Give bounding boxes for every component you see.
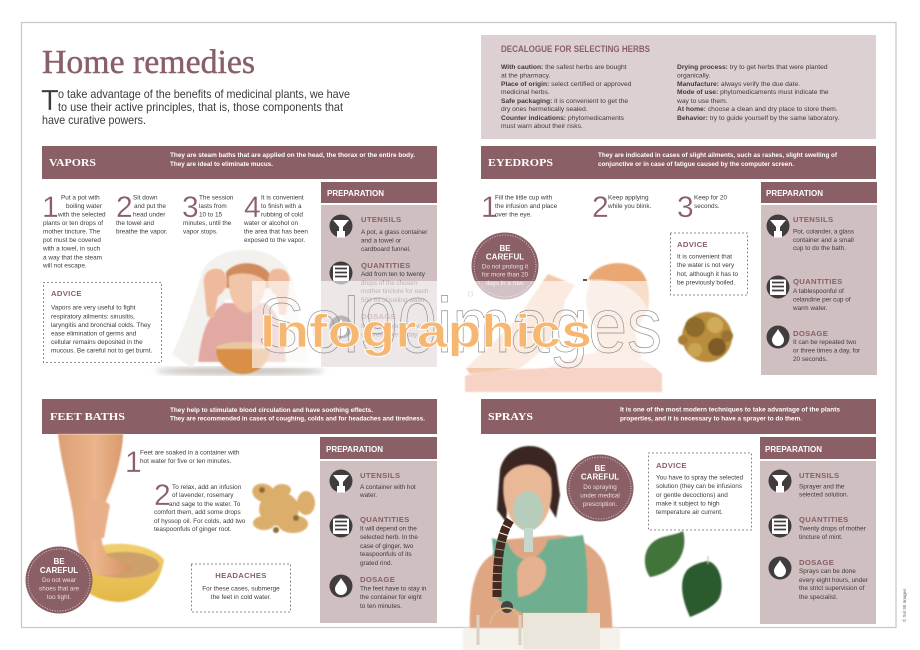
step 2: and put the <box>134 203 166 210</box>
preparation panel: vapors: drops of the chosen <box>361 280 418 287</box>
be careful badge: BE <box>499 244 511 253</box>
be careful badge <box>566 454 634 522</box>
advice box: or gentle decoctions) and <box>656 492 728 499</box>
panel: feet baths <box>26 399 437 623</box>
advice box: ADVICE <box>51 289 82 298</box>
be careful badge: shoes that are <box>39 586 79 592</box>
advice box <box>670 233 748 295</box>
decalogue left column: must warn about their risks. <box>501 123 583 130</box>
advice box: laryngitis and bronchial colds. They <box>51 322 152 329</box>
preparation panel: eyedrops: or three times a day, for <box>793 347 861 354</box>
advice box <box>44 282 162 362</box>
be careful badge: Do spraying <box>583 484 617 491</box>
step 1: with a towel, in such <box>42 246 101 253</box>
photo: woman applying eyedrops <box>465 263 662 392</box>
preparation panel: vapors: DOSAGE <box>361 312 396 321</box>
preparation panel: sprays: every eight hours, under <box>799 577 869 584</box>
preparation panel: eyedrops: container and a small <box>793 237 854 244</box>
step 1: boiling water <box>66 203 103 210</box>
preparation panel: eyedrops: UTENSILS <box>793 215 833 224</box>
step 2: head under <box>133 212 166 219</box>
feet baths header bar <box>42 399 437 434</box>
advice box: temperature air current. <box>656 509 723 516</box>
decalogue right column: Behavior: try to guide yourself by the same laboratory. <box>677 115 839 122</box>
sprays header bar <box>481 399 876 434</box>
preparation panel: eyedrops: PREPARATION <box>766 189 823 198</box>
preparation panel: eyedrops: DOSAGE <box>793 329 828 338</box>
advice box: solution (they can be infusions <box>656 483 742 490</box>
photo: woman inhaling vapor <box>155 250 325 375</box>
watermark: Sol90images <box>258 281 662 369</box>
preparation panel: vapors: A pot, a glass container <box>361 229 428 236</box>
preparation panel: feet baths: DOSAGE <box>360 575 395 584</box>
preparation panel: vapors: mother tincture for each <box>361 288 429 295</box>
decalogue right column: At home: choose a clean and dry place to store them. <box>677 106 838 113</box>
step 1: Fill the little cup with <box>495 194 553 201</box>
preparation panel: sprays: DOSAGE <box>799 558 834 567</box>
intro text: T <box>41 85 59 117</box>
advice box: ease elimination of germs and <box>51 331 137 338</box>
step 2 <box>116 191 168 236</box>
preparation panel: feet baths: water. <box>359 492 377 499</box>
photo: girl with nebulizer mask <box>463 446 620 650</box>
decalogue left column: at the pharmacy. <box>501 72 550 80</box>
advice box: ADVICE <box>677 240 708 249</box>
preparation panel: eyedrops: Pot, colander, a glass <box>793 229 854 236</box>
headaches box: the feet in cold water. <box>211 594 271 601</box>
decalogue right column: Manufacture: always verify the due date. <box>677 81 800 88</box>
step 2: 2 <box>154 479 171 512</box>
advice box: make it subject to high <box>656 501 720 508</box>
preparation panel: feet baths: PREPARATION <box>326 445 383 454</box>
panel: eyedrops <box>465 146 877 392</box>
headaches box <box>192 564 290 612</box>
vapors header bar: They are steam baths that are applied on the head, the thorax or the entire body. <box>170 152 415 159</box>
decalogue right column <box>676 64 839 122</box>
preparation panel: sprays: Twenty drops of mother <box>799 526 867 532</box>
step 2: Sit down <box>133 194 158 201</box>
preparation panel: feet baths: teaspoonfuls of its <box>360 551 412 558</box>
decalogue left column: medicinal herbs. <box>501 89 550 96</box>
step 2 <box>592 191 652 224</box>
step 1 <box>125 446 240 479</box>
title: Home remedies <box>42 44 255 81</box>
sprays header bar: It is one of the most modern techniques to take advantage of the plants <box>620 406 840 414</box>
be careful badge: BE <box>594 464 606 473</box>
step 2: the towel and <box>116 220 154 227</box>
step 4: exposed to the vapor. <box>244 237 305 244</box>
icon: list <box>766 276 790 298</box>
icon: funnel <box>768 470 792 492</box>
be careful badge <box>472 232 538 300</box>
advice box: the water is not very <box>677 262 735 269</box>
preparation panel: feet baths <box>320 437 437 623</box>
step 1: 1 <box>125 446 142 479</box>
preparation panel: sprays: Sprayer and the <box>799 483 845 490</box>
preparation panel: vapors: It can be repeated two <box>361 323 425 330</box>
icon: funnel <box>330 470 352 492</box>
advice box: hot, although it has to <box>677 271 739 278</box>
preparation panel: vapors: 500 ml of boiling water. <box>361 297 427 304</box>
preparation panel: feet baths: grated rind. <box>360 560 393 567</box>
advice box: cellular remains deposited in the <box>51 339 143 346</box>
preparation panel: sprays: PREPARATION <box>765 445 822 454</box>
decalogue left column: With caution: the safest herbs are bought <box>501 64 627 71</box>
step 1: 1 <box>481 191 498 224</box>
decalogue left column: Place of origin: select certified or approved <box>501 81 632 88</box>
step 3: 3 <box>677 191 694 224</box>
be careful badge: CAREFUL <box>581 472 619 482</box>
step 3: 10 to 15 <box>199 212 223 219</box>
step 2 <box>154 479 246 533</box>
icon: drop <box>330 574 352 598</box>
advice box: be previously boiled. <box>677 280 735 287</box>
step 1: Feet are soaked in a container with <box>140 450 240 456</box>
eyedrops header bar <box>481 146 876 179</box>
step 2: teaspoonfuls of ginger root. <box>154 526 232 533</box>
be careful badge: for more than 20 <box>482 272 529 278</box>
icon: list <box>330 514 352 538</box>
credit: © Sol 90 Images <box>901 588 907 622</box>
step 1: with the selected <box>57 212 106 219</box>
feet baths header bar: FEET BATHS <box>50 411 125 423</box>
be careful badge: days in a row. <box>486 280 524 287</box>
intro text: o take advantage of the benefits of medicinal plants, we have <box>58 87 350 101</box>
be careful badge: Do not wear <box>42 577 76 584</box>
be careful badge: Do not prolong it <box>482 264 528 270</box>
preparation panel: sprays: the strict supervision of <box>799 585 865 592</box>
preparation panel: vapors: Add from ten to twenty <box>361 271 426 278</box>
step 1: a way that the steam <box>43 254 102 261</box>
step 2: comfort them, add some drops <box>154 509 241 516</box>
preparation panel: feet baths: The feet have to stay in <box>360 586 427 592</box>
preparation panel: feet baths: UTENSILS <box>360 471 400 480</box>
step 4: 4 <box>244 191 261 224</box>
photo: ginger root <box>250 480 315 533</box>
step 1: mother tincture. The <box>43 229 101 236</box>
icon: funnel <box>330 214 352 238</box>
preparation panel: sprays <box>760 437 876 624</box>
advice box: respiratory ailments: sinusitis, <box>51 313 135 320</box>
decalogue left column: Counter indications: phytomedicaments <box>501 115 625 122</box>
preparation panel: vapors: PREPARATION <box>327 189 384 198</box>
step 1 <box>42 191 106 270</box>
step 4: It is convenient <box>261 194 304 201</box>
preparation panel: eyedrops: cup to do the bath. <box>793 245 846 252</box>
icon: funnel <box>766 214 790 238</box>
preparation panel: sprays: QUANTITIES <box>799 515 849 524</box>
preparation panel: feet baths: the container for eight <box>360 594 422 601</box>
preparation panel: sprays: Sprays can be done <box>799 568 856 575</box>
preparation panel: eyedrops: 20 seconds. <box>793 356 828 363</box>
decalogue right column: Drying process: try to get herbs that were planted <box>677 64 828 71</box>
step 1: over the eye. <box>495 212 532 219</box>
icon: list <box>768 514 792 538</box>
intro text: have curative powers. <box>42 113 146 127</box>
preparation panel: vapors: and a towel or <box>361 238 402 245</box>
preparation panel: feet baths: case of ginger, two <box>360 543 414 550</box>
vapors header bar <box>42 146 437 179</box>
preparation panel: sprays: selected solution. <box>799 492 849 498</box>
preparation panel: eyedrops: It can be repeated two <box>793 339 857 346</box>
step 2: 2 <box>592 191 609 224</box>
step 4: to finish with a <box>261 203 302 210</box>
preparation panel: eyedrops: QUANTITIES <box>793 277 843 286</box>
eyedrops header bar: EYEDROPS <box>488 157 553 169</box>
preparation panel: feet baths: It will depend on the <box>360 526 417 532</box>
advice box <box>648 453 752 530</box>
preparation panel: eyedrops <box>761 182 877 375</box>
be careful badge: CAREFUL <box>486 252 524 262</box>
preparation panel: vapors: cardboard funnel. <box>361 246 411 253</box>
eyedrops header bar: They are indicated in cases of slight ailments, such as rashes, slight swelling of <box>598 152 838 159</box>
step 3: The session <box>199 194 234 201</box>
step 2: while you blink. <box>607 203 652 210</box>
photo: feet in yellow basin <box>58 434 164 602</box>
panel: vapors <box>42 146 437 375</box>
decalogue left column: dry ones hermetically sealed. <box>501 106 588 113</box>
step 3: 3 <box>182 191 199 224</box>
icon: drop <box>766 326 790 348</box>
advice box: You have to spray the selected <box>656 475 744 482</box>
preparation panel: eyedrops: A tablespoonful of <box>793 288 844 295</box>
headaches box: HEADACHES <box>215 571 267 580</box>
advice box: It is convenient that <box>677 254 732 261</box>
decalogue right column: organically. <box>677 72 710 80</box>
feet baths header bar: They are recommended in cases of coughing, colds and for headaches and tiredness. <box>170 416 425 422</box>
decalogue right column: Mode of use: phytomedicaments must indicate the <box>677 89 829 96</box>
watermark: Infographics <box>260 305 592 357</box>
preparation panel: feet baths: selected herb. In the <box>360 534 418 541</box>
step 4: rubbing of cold <box>261 212 303 219</box>
step 3 <box>182 191 234 236</box>
be careful badge: under medical <box>580 492 620 500</box>
preparation panel: vapors: or three times a day. <box>361 332 419 338</box>
step 1: will not escape. <box>42 263 87 270</box>
advice box: mucous. Be careful not to get burnt. <box>51 348 152 355</box>
vapors header bar: VAPORS <box>49 157 96 169</box>
step 3: Keep for 20 <box>694 194 727 201</box>
feet baths header bar: They help to stimulate blood circulation and have soothing effects. <box>170 407 373 414</box>
vapors header bar: They are ideal to eliminate mucus. <box>170 161 273 168</box>
be careful badge: prescription. <box>583 501 617 508</box>
be careful badge <box>26 546 92 614</box>
advice box: ADVICE <box>656 461 687 470</box>
be careful badge: BE <box>53 557 65 566</box>
step 1: the infusion and place <box>495 203 558 210</box>
eyedrops header bar: conjunctive or in case of fatigue caused by the computer screen. <box>598 161 794 168</box>
step 3: vapor stops. <box>183 229 218 236</box>
step 2: To relax, add an infusion <box>172 484 242 491</box>
sprays header bar: SPRAYS <box>488 411 533 423</box>
step 1 <box>481 191 558 224</box>
icon: drop <box>330 316 352 338</box>
preparation panel: sprays: tincture of mint. <box>799 534 843 541</box>
intro text: to use their active principles, that is, those components that <box>58 100 344 114</box>
step 2: breathe the vapor. <box>116 229 168 236</box>
step 2: 2 <box>116 191 133 224</box>
step 4: the area that has been <box>244 229 308 236</box>
panel: decalogue for selecting herbs <box>481 35 876 139</box>
stray marker <box>468 292 472 296</box>
photo: mint leaves <box>645 531 722 617</box>
icon: drop <box>768 556 792 580</box>
headaches box: For these cases, submerge <box>202 586 280 592</box>
photo: dried herb pile <box>678 312 733 362</box>
sprays header bar: properties, and it is necessary to have a sprayer to do them. <box>620 416 802 422</box>
step 1: plants or ten drops of <box>43 220 103 227</box>
step 3: lasts from <box>199 203 227 210</box>
step 3 <box>677 191 727 224</box>
preparation panel: feet baths: A container with hot <box>360 484 416 491</box>
step 1: pot must be covered <box>43 237 101 244</box>
step 4: water or alcohol on <box>243 220 298 227</box>
decalogue right column: way to use them. <box>676 98 728 105</box>
preparation panel: vapors: UTENSILS <box>361 215 401 224</box>
step 4 <box>243 191 308 244</box>
step 2: Keep applying <box>608 194 649 201</box>
preparation panel: sprays: the specialist. <box>799 594 838 601</box>
preparation panel: eyedrops: warm water. <box>792 305 828 312</box>
preparation panel: feet baths: to ten minutes. <box>360 603 402 610</box>
preparation panel: feet baths: QUANTITIES <box>360 515 410 524</box>
panel: sprays <box>463 399 876 650</box>
be careful badge: too tight. <box>47 594 71 601</box>
step 3: seconds. <box>694 203 720 210</box>
decalogue heading: DECALOGUE FOR SELECTING HERBS <box>501 44 650 54</box>
step 2: of hyssop oil. For colds, add two <box>154 518 246 525</box>
preparation panel: vapors: QUANTITIES <box>361 261 411 270</box>
preparation panel: eyedrops: celandine per cup of <box>793 296 851 304</box>
preparation panel: vapors <box>321 182 437 367</box>
step 1: Put a pot with <box>61 194 100 201</box>
step 1: hot water for five or ten minutes. <box>140 458 232 465</box>
decalogue left column <box>501 64 632 130</box>
icon: list <box>330 262 352 284</box>
step 3: minutes, until the <box>183 220 232 227</box>
be careful badge: CAREFUL <box>40 566 78 575</box>
step 1: 1 <box>42 191 59 224</box>
intro text <box>41 85 350 127</box>
decalogue left column: Safe packaging: it is convenient to get the <box>501 98 628 105</box>
advice box: Vapors are very useful to fight <box>51 305 136 312</box>
preparation panel: sprays: UTENSILS <box>799 471 839 480</box>
step 2: and sage to the water. To <box>169 501 241 508</box>
step 2: of lavender, rosemary <box>172 492 234 499</box>
